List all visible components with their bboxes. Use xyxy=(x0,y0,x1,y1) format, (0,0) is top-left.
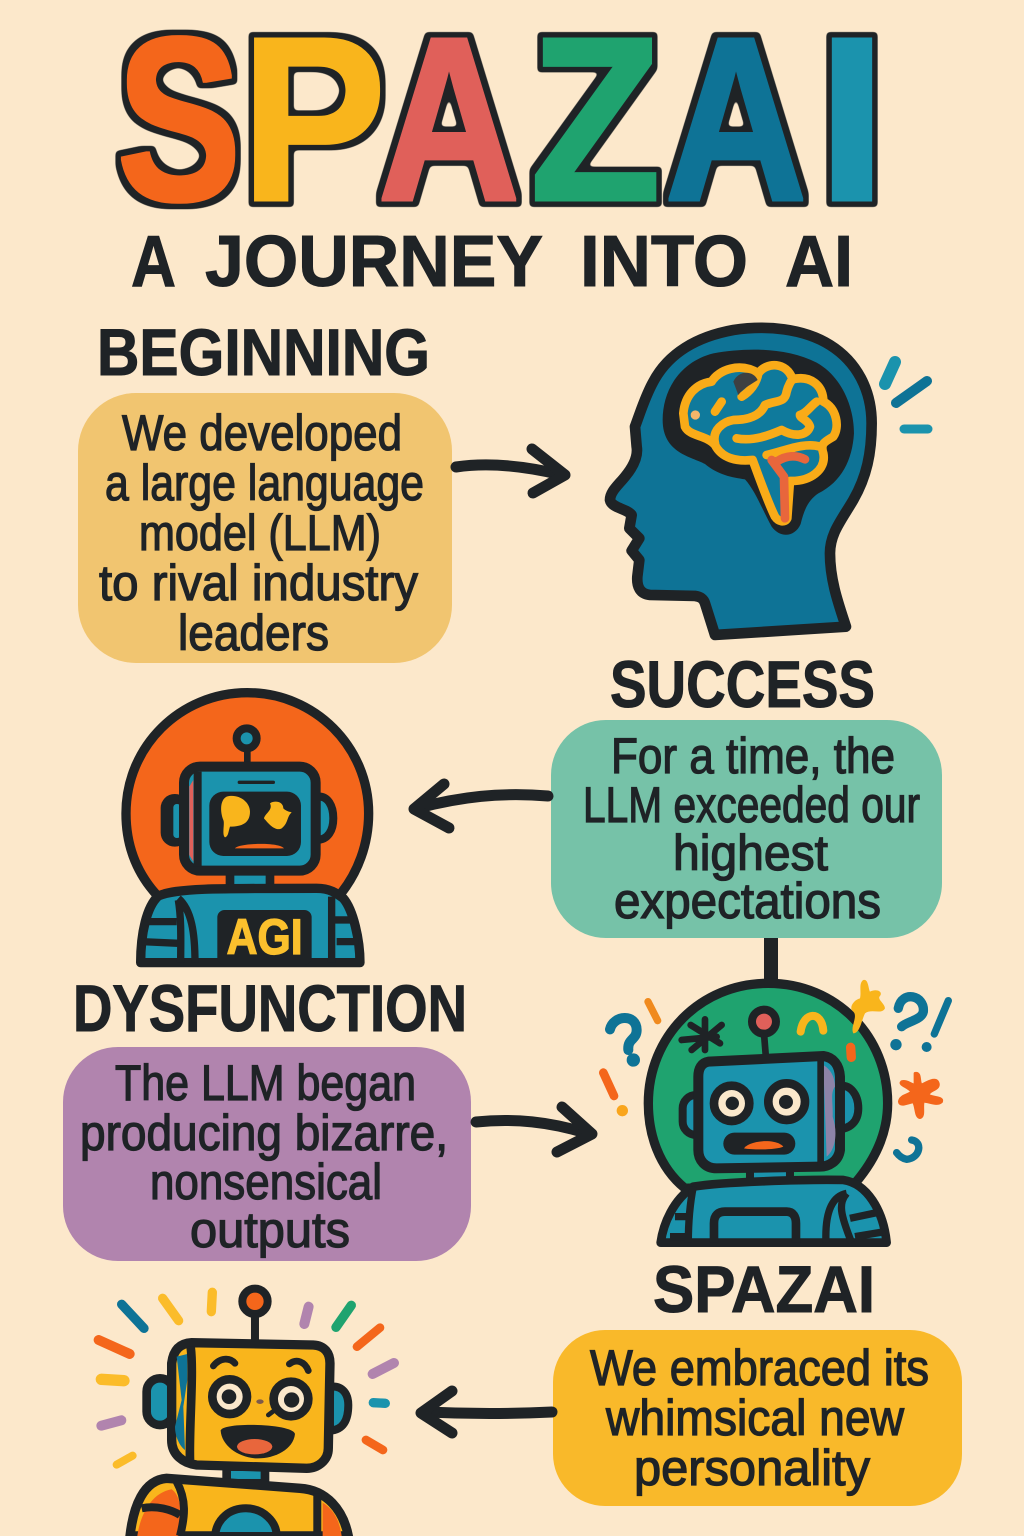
panel: success: highest xyxy=(673,825,828,881)
subtitle: INTO xyxy=(580,222,748,302)
arrow: beginning to brain xyxy=(456,449,565,493)
doodles xyxy=(610,1018,637,1050)
panel: dysfunction: producing bizarre, xyxy=(80,1105,448,1161)
ears xyxy=(147,1378,173,1425)
panel: spazai xyxy=(553,1330,962,1506)
arrow: dysfunction to robot xyxy=(476,1107,592,1152)
panel: dysfunction: nonsensical xyxy=(150,1154,382,1210)
arrow: spazai to robot xyxy=(421,1391,552,1433)
icon: spark lines xyxy=(885,362,928,429)
panel: beginning: leaders xyxy=(178,605,329,661)
panel: beginning: to rival industry xyxy=(99,555,418,611)
brain xyxy=(663,350,854,535)
panel: dysfunction: The LLM began xyxy=(115,1055,416,1111)
rays xyxy=(122,1304,144,1328)
panel: spazai: whimsical new xyxy=(605,1390,905,1446)
panel: success xyxy=(551,720,942,938)
title xyxy=(117,0,888,250)
subtitle: A xyxy=(131,222,176,302)
panel: beginning: model (LLM) xyxy=(139,505,381,561)
panel: beginning xyxy=(78,393,452,663)
heading: beginning: BEGINNING xyxy=(97,315,430,389)
heading: dysfunction: DYSFUNCTION xyxy=(73,971,467,1045)
panel: dysfunction xyxy=(63,1047,471,1261)
subtitle: AI xyxy=(785,222,853,302)
asterisk xyxy=(682,1019,722,1050)
panel: dysfunction: outputs xyxy=(190,1202,350,1258)
connector xyxy=(764,936,778,986)
subtitle xyxy=(131,222,853,302)
icon: confused robot xyxy=(603,980,948,1243)
icon: happy robot xyxy=(99,1289,394,1536)
arrow: success to robot xyxy=(414,784,548,828)
icon: AGI robot xyxy=(126,693,369,965)
panel: spazai: personality xyxy=(634,1440,870,1496)
panel: success: expectations xyxy=(614,873,881,929)
panel: beginning: We developed xyxy=(122,405,402,461)
heading: spazai: SPAZAI xyxy=(653,1252,875,1326)
subtitle: JOURNEY xyxy=(205,222,543,302)
panel: beginning: a large language xyxy=(105,455,424,511)
panel: spazai: We embraced its xyxy=(590,1340,929,1396)
icon: head with brain xyxy=(610,328,872,635)
icon: AGI robot: AGI xyxy=(227,909,303,965)
panel: success: For a time, the xyxy=(611,728,895,784)
panel: success: LLM exceeded our xyxy=(583,777,920,833)
heading: success: SUCCESS xyxy=(610,647,875,721)
